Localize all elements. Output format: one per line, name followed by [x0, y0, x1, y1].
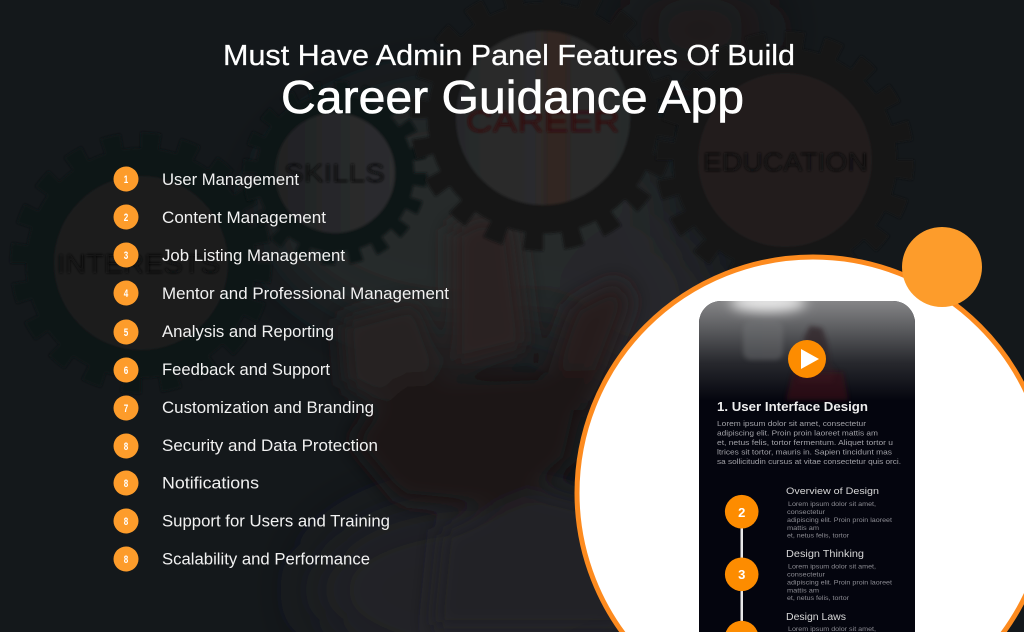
step 3: 3	[738, 567, 745, 582]
item 3: Job Listing Management	[162, 246, 345, 265]
step 3	[725, 549, 892, 602]
title line 2: Career Guidance App	[281, 71, 744, 123]
item 4	[114, 280, 449, 306]
step 2: Overview of Design	[786, 486, 879, 497]
item 11: 8	[124, 554, 128, 566]
item 11: Scalability and Performance	[162, 550, 370, 568]
gear label: skills: SKILLS	[284, 158, 385, 188]
item 2: Content Management	[162, 208, 326, 227]
item 9	[114, 470, 259, 496]
step 3: adipiscing elit. Proin proin laoreet	[787, 580, 892, 586]
title	[223, 40, 795, 123]
white circle panel	[577, 257, 1024, 632]
item 6: 6	[124, 365, 128, 377]
step 3: Lorem ipsum dolor sit amet,	[788, 564, 876, 570]
step 3: Design Thinking	[786, 549, 864, 560]
step 2: et, netus felis, tortor	[787, 532, 850, 540]
item 5: 5	[124, 327, 128, 339]
gear: interests	[19, 141, 263, 385]
step 2: adipiscing elit. Proin proin laoreet	[787, 517, 892, 524]
item 9: 8	[124, 478, 128, 490]
phone screen	[699, 301, 915, 632]
item 10: 8	[124, 516, 128, 528]
section paragraph: sa sollicitudin cursus at vitae consectetur quis orci.	[717, 457, 901, 466]
step 3: mattis am	[787, 588, 819, 594]
play button	[788, 340, 826, 378]
item 11	[114, 546, 370, 572]
gear label: education: EDUCATION	[703, 147, 868, 177]
gear label: interests: INTERESTS	[57, 249, 220, 279]
step 2: mattis am	[787, 525, 819, 532]
step 2: 2	[738, 505, 745, 520]
item 10: Support for Users and Training	[162, 512, 390, 530]
section paragraph	[717, 419, 901, 466]
item 8	[114, 434, 378, 458]
step 4: Design Laws	[786, 612, 846, 623]
gear label: career: CAREER	[466, 104, 620, 139]
step 2	[725, 486, 892, 540]
timeline connector	[740, 528, 743, 621]
orange accent circle	[902, 227, 982, 307]
item 2	[114, 204, 326, 230]
item 2: 2	[124, 212, 128, 224]
section paragraph: adipiscing elit. Proin proin laoreet mattis am	[717, 428, 878, 438]
item 6: Feedback and Support	[162, 360, 330, 379]
item 7: 7	[124, 403, 128, 415]
item 1: 1	[124, 174, 128, 186]
section paragraph: et, netus felis, tortor fermentum. Aliquet tortor u	[717, 438, 893, 447]
item 7	[114, 396, 374, 420]
item 8: 8	[124, 441, 128, 453]
item 4: Mentor and Professional Management	[162, 284, 449, 303]
item 6	[114, 358, 330, 382]
gear: skills	[250, 88, 420, 258]
item 3	[114, 242, 345, 268]
item 7: Customization and Branding	[162, 398, 374, 417]
section heading: 1. User Interface Design	[717, 399, 868, 414]
title line 1: Must Have Admin Panel Features Of Build	[223, 40, 795, 72]
feature list	[114, 166, 449, 572]
gear: career	[419, 0, 667, 242]
item 5	[114, 320, 334, 344]
step 3: consectetur	[787, 572, 826, 578]
section paragraph: ltrices sit tortor, mauris in. Sapien tincidunt mas	[717, 448, 892, 456]
item 3: 3	[124, 250, 128, 262]
step 2: consectetur	[787, 509, 826, 516]
step 2: Lorem ipsum dolor sit amet,	[788, 501, 876, 508]
item 10	[114, 508, 390, 534]
item 4: 4	[124, 288, 129, 300]
item 9: Notifications	[162, 474, 259, 492]
item 8: Security and Data Protection	[162, 436, 378, 455]
item 1	[114, 166, 299, 192]
gear: education	[665, 40, 905, 280]
phone mockup	[699, 292, 915, 632]
item 5: Analysis and Reporting	[162, 322, 334, 341]
video thumbnail	[699, 292, 915, 401]
item 1: User Management	[162, 170, 299, 189]
section paragraph: Lorem ipsum dolor sit amet, consectetur	[717, 419, 867, 428]
step 3: et, netus felis, tortor	[787, 595, 850, 602]
step 4	[725, 612, 876, 632]
